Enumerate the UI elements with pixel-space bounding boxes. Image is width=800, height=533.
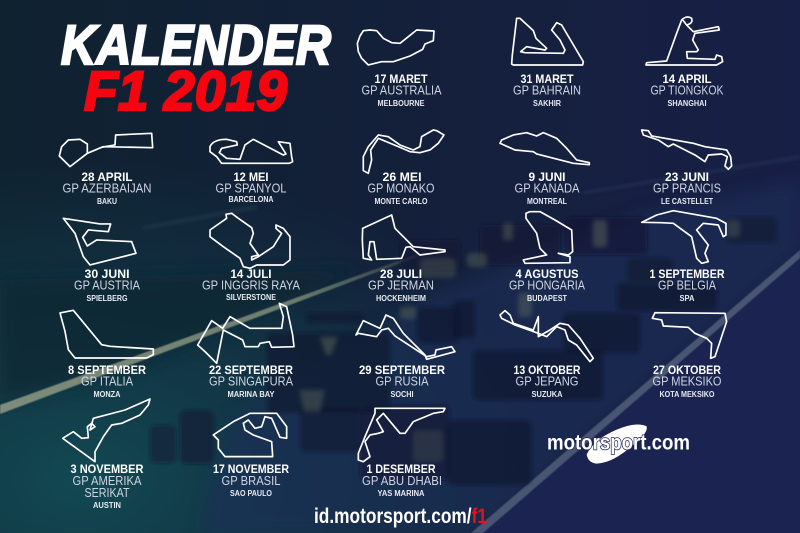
race: GP Amerika Serikat: SERIKAT (84, 486, 130, 500)
race: GP Rusia: 29 SEPTEMBER (359, 363, 445, 377)
race: GP Austria: GP AUSTRIA (74, 278, 141, 292)
race: GP Abu Dhabi: GP ABU DHABI (362, 474, 442, 488)
race: GP Belgia: 1 SEPTEMBER (650, 267, 725, 281)
race: GP Spanyol: GP SPANYOL (216, 182, 286, 196)
race: GP Austria (63, 218, 141, 303)
race: GP Hongaria: GP HONGARIA (509, 278, 586, 292)
race: GP Australia (357, 30, 442, 108)
race: GP Jerman: GP JERMAN (368, 278, 434, 292)
footer url: id.motorsport.com/f1: id.motorsport.com/f1 (314, 505, 487, 528)
race: GP Kanada: 9 JUNI (528, 170, 566, 184)
race: GP Jerman: 28 JULI (380, 267, 422, 281)
race: GP Kanada: MONTREAL (527, 196, 567, 206)
race: GP Spanyol: BARCELONA (228, 194, 274, 204)
race: GP Prancis: 23 JUNI (665, 170, 709, 184)
race: GP Prancis: GP PRANCIS (653, 182, 721, 196)
race: GP Tiongkok: 14 APRIL (662, 72, 712, 86)
race: GP Meksiko: GP MEKSIKO (652, 374, 722, 388)
race: GP Monako: GP MONAKO (368, 182, 435, 196)
race: GP Prancis (642, 130, 732, 206)
race: GP Jepang: 13 OKTOBER (514, 363, 581, 377)
race: GP Austria: SPIELBERG (86, 293, 128, 303)
race: GP Jepang: SUZUKA (532, 389, 562, 399)
race: GP Jerman: HOCKENHEIM (376, 293, 426, 303)
race: GP Monako (363, 130, 444, 206)
race: GP Singapura: GP SINGAPURA (209, 374, 294, 388)
race: GP Jepang (500, 311, 593, 399)
title: KALENDER F1 2019: F1 2019 (84, 59, 287, 122)
race: GP Hongaria (509, 212, 586, 303)
race: GP Hongaria: 4 AGUSTUS (516, 267, 578, 281)
race: GP Inggris Raya: SILVERSTONE (226, 292, 276, 302)
race: GP Monako: MONTE CARLO (374, 196, 428, 206)
race: GP Australia: GP AUSTRALIA (362, 84, 442, 98)
race: GP Spanyol (210, 139, 293, 204)
race: GP Austria: 30 JUNI (84, 267, 130, 281)
race: GP Australia: MELBOURNE (378, 98, 425, 108)
race: GP Rusia (356, 315, 455, 399)
race: GP Amerika Serikat: AUSTIN (93, 500, 121, 510)
title: KALENDER F1 2019 (61, 13, 331, 122)
race: GP Rusia: SOCHI (390, 389, 414, 399)
car silhouettes (150, 217, 777, 485)
race: GP Singapura (198, 303, 294, 399)
race: GP Belgia: GP BELGIA (658, 278, 717, 292)
race: GP Hongaria: BUDAPEST (527, 293, 568, 303)
race: GP Italia: GP ITALIA (81, 374, 134, 388)
race: GP Amerika Serikat: 3 NOVEMBER (70, 462, 144, 476)
race: GP Bahrain: GP BAHRAIN (513, 84, 581, 98)
title: KALENDER F1 2019: KALENDER (61, 13, 331, 76)
race: GP Inggris Raya: 14 JULI (230, 267, 272, 281)
race: GP Singapura: 22 SEPTEMBER (209, 363, 293, 377)
race: GP Italia: 8 SEPTEMBER (68, 363, 146, 377)
race: GP Jerman (362, 215, 445, 303)
race: GP Prancis: LE CASTELLET (661, 196, 714, 206)
race: GP Monako: 26 MEI (382, 170, 422, 184)
logo: motorsport.com (547, 424, 690, 464)
race: GP Belgia: SPA (680, 293, 694, 303)
race: GP Singapura: MARINA BAY (228, 389, 275, 399)
race: GP Jepang: GP JEPANG (516, 374, 578, 388)
race: GP Belgia (642, 211, 726, 303)
race: GP Tiongkok (646, 17, 724, 108)
race: GP Tiongkok: GP TIONGKOK (650, 84, 724, 98)
race: GP Brasil: GP BRASIL (222, 474, 280, 488)
race: GP Bahrain: 31 MARET (520, 72, 574, 86)
race: GP Tiongkok: SHANGHAI (668, 98, 706, 108)
race: GP Spanyol: 12 MEI (234, 170, 268, 184)
race: GP Kanada (500, 133, 589, 206)
race: GP Australia: 17 MARET (374, 72, 428, 86)
race: GP Inggris Raya (202, 213, 301, 302)
race: GP Azerbaijan (59, 133, 153, 206)
race: GP Abu Dhabi: YAS MARINA (378, 488, 424, 498)
race: GP Azerbaijan: BAKU (97, 196, 117, 206)
race: GP Rusia: GP RUSIA (376, 374, 429, 388)
race: GP Abu Dhabi (358, 408, 445, 498)
race: GP Inggris Raya: GP INGGRIS RAYA (202, 278, 301, 292)
race: GP Italia: MONZA (94, 389, 120, 399)
race: GP Brasil (213, 413, 289, 498)
race: GP Amerika Serikat (63, 399, 150, 510)
race: GP Kanada: GP KANADA (514, 182, 580, 196)
race: GP Azerbaijan: GP AZERBAIJAN (62, 182, 152, 196)
race: GP Bahrain (512, 18, 583, 108)
race: GP Meksiko (652, 313, 727, 399)
race: GP Brasil: SAO PAULO (230, 488, 272, 498)
race: GP Meksiko: 27 OKTOBER (653, 363, 721, 377)
race: GP Abu Dhabi: 1 DESEMBER (366, 462, 436, 476)
race: GP Azerbaijan: 28 APRIL (82, 170, 133, 184)
race: GP Meksiko: KOTA MEKSIKO (660, 389, 715, 399)
race: GP Brasil: 17 NOVEMBER (213, 462, 289, 476)
logo: motorsport.com: motorsport.com (547, 432, 690, 454)
race: GP Amerika Serikat: GP AMERIKA (72, 474, 142, 488)
race: GP Bahrain: SAKHIR (533, 98, 562, 108)
race: GP Italia (60, 310, 153, 399)
